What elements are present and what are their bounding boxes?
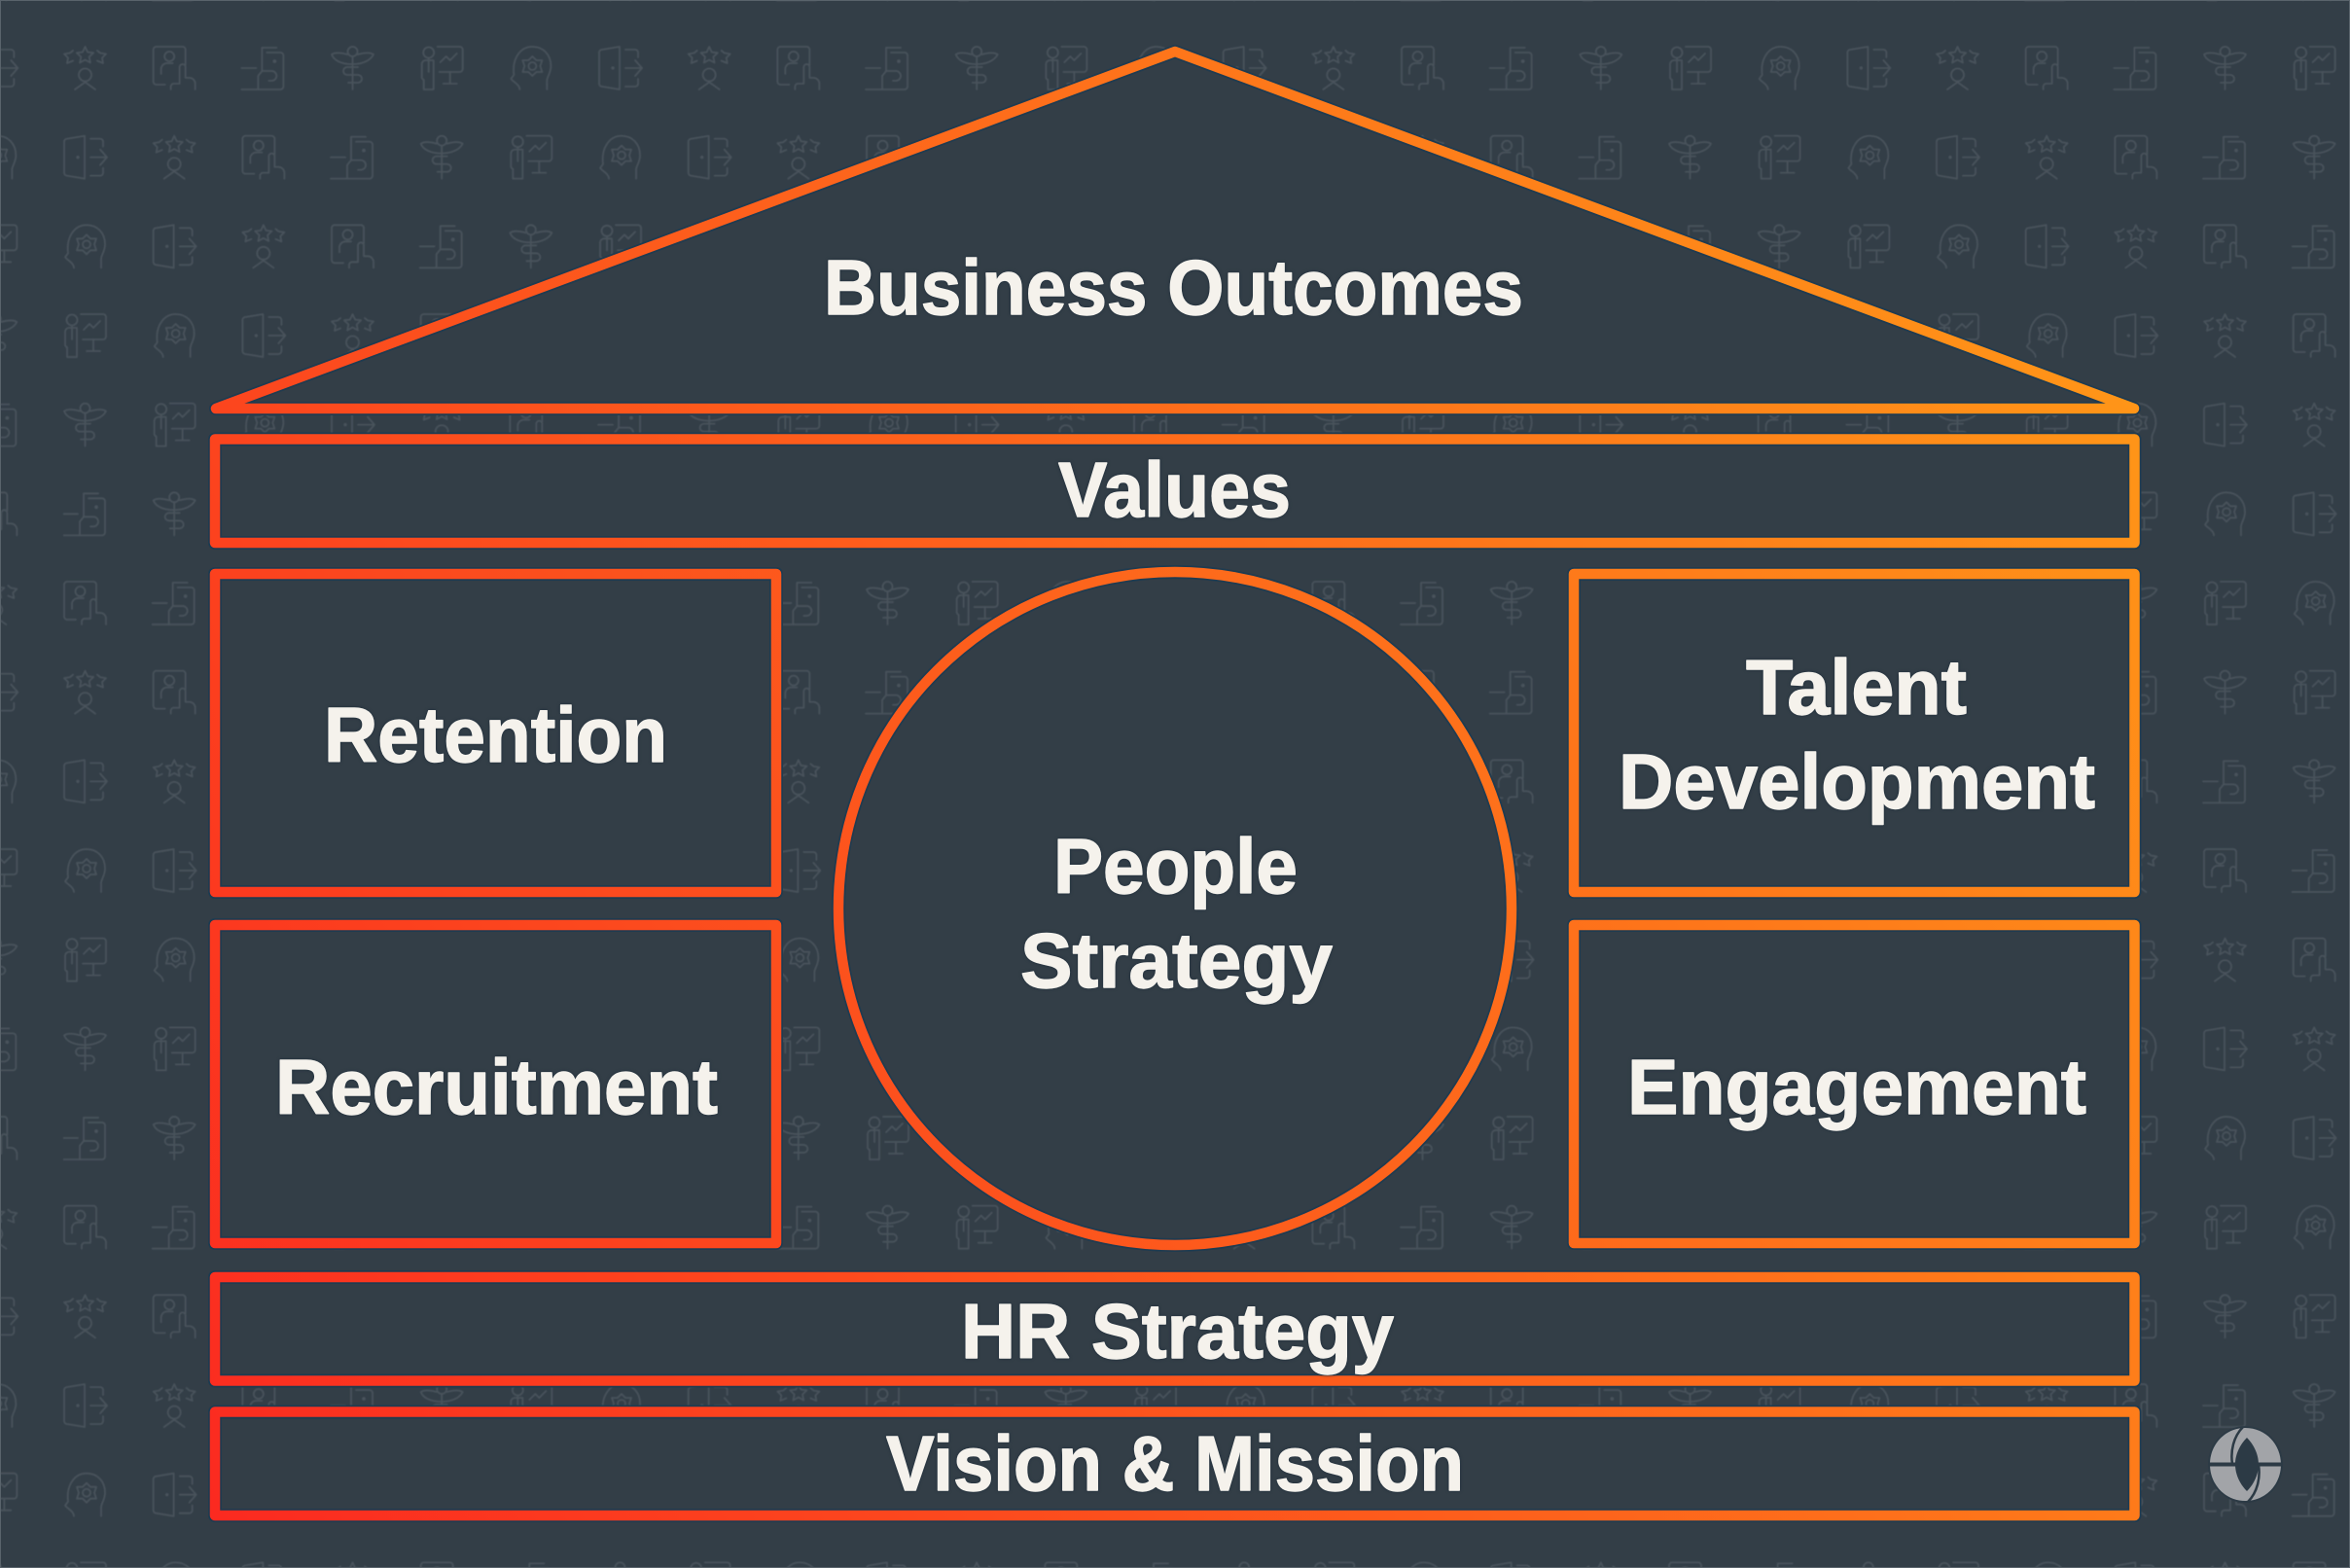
label: Values: Values	[1058, 446, 1291, 533]
box: Retention	[215, 574, 776, 892]
box: Talent Development	[1574, 574, 2134, 892]
label: Business Outcomes: Business Outcomes	[824, 244, 1523, 331]
band: HR Strategy	[215, 1277, 2134, 1381]
label: Vision & Mission: Vision & Mission	[886, 1420, 1464, 1507]
band: Vision & Mission	[215, 1412, 2134, 1515]
circle: People Strategy	[838, 572, 1512, 1245]
label: Engagement: Engagement	[1627, 1044, 2086, 1130]
box: Recruitment	[215, 925, 776, 1243]
icon: logo	[2208, 1426, 2283, 1503]
label: Retention: Retention	[324, 692, 667, 778]
band: Values	[215, 440, 2134, 543]
label: Development: Development	[1619, 738, 2095, 825]
label: Strategy: Strategy	[1020, 917, 1334, 1004]
label: Recruitment: Recruitment	[275, 1044, 718, 1130]
label: People: People	[1053, 823, 1298, 909]
roof: Business Outcomes	[216, 52, 2134, 409]
label: Talent: Talent	[1746, 644, 1967, 731]
label: HR Strategy: HR Strategy	[961, 1288, 1394, 1374]
box: Engagement	[1574, 925, 2134, 1243]
